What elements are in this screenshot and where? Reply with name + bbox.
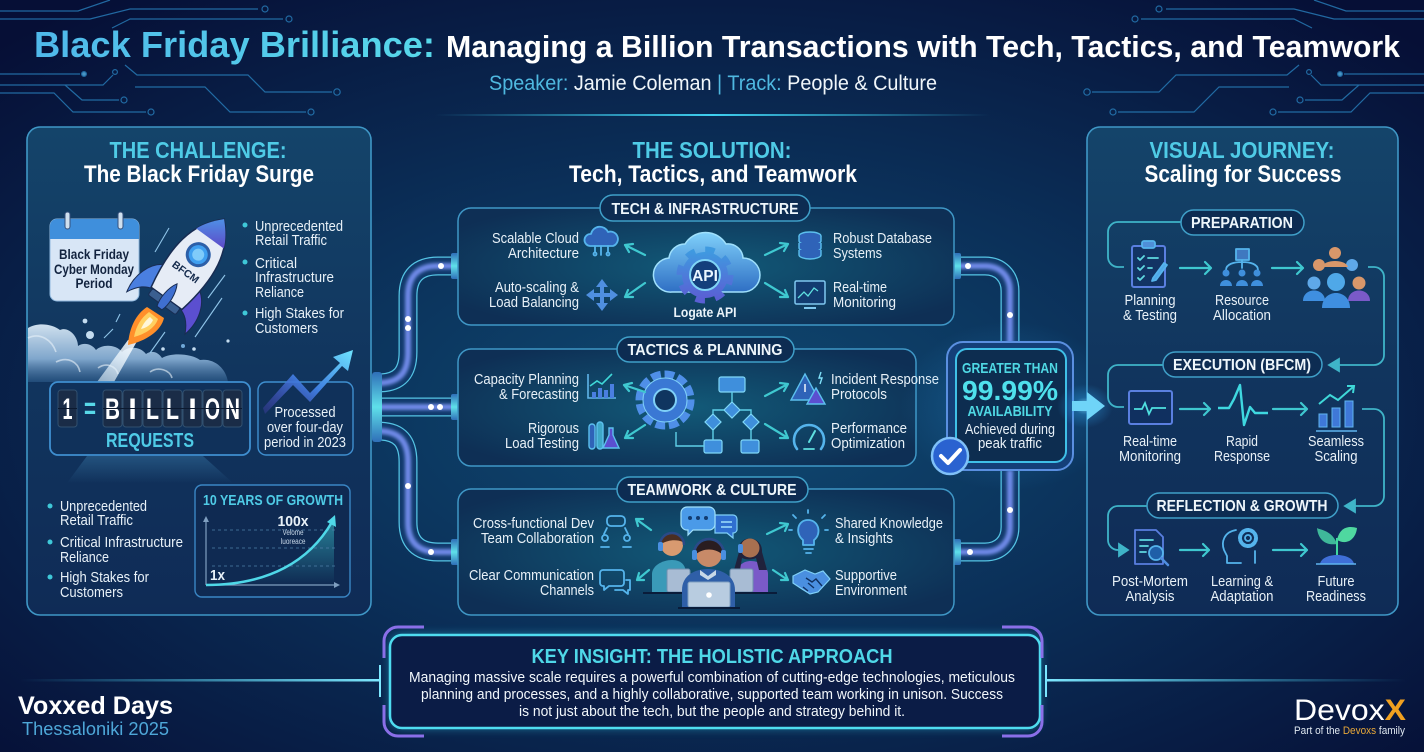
- labels: preparation: Resource: [1215, 292, 1269, 309]
- challenge heading: [84, 137, 314, 188]
- brand: voxxed days: [18, 692, 173, 739]
- icon: monitor pulse: [1129, 391, 1172, 424]
- bullets: upper list: [242, 218, 344, 337]
- labels: execution: Monitoring: [1119, 448, 1181, 465]
- icon: monitor: [795, 281, 825, 308]
- text: auto scaling: Auto-scaling &: [495, 279, 579, 296]
- text: scalable cloud: Scalable Cloud: [492, 230, 579, 247]
- title: Black Friday Brilliance:: [34, 24, 435, 65]
- pill: tactics heading: [617, 337, 794, 362]
- labels: preparation: & Testing: [1123, 307, 1177, 324]
- journey heading: VISUAL JOURNEY:: [1150, 137, 1334, 163]
- text: real-time monitoring: Monitoring: [833, 294, 896, 311]
- labels: reflection: Post-Mortem: [1112, 573, 1188, 590]
- pipes: left connectors: [372, 253, 459, 565]
- bullets: lower list: Critical Infrastructure: [60, 534, 183, 551]
- key insight side lines: [20, 665, 1406, 697]
- arrow: response to scaling: [1273, 403, 1307, 415]
- icon: rocket: BFCM: [170, 259, 201, 286]
- callout: availability: peak traffic: [978, 435, 1042, 452]
- brand: devoxx: Part of the Devoxs family: [1294, 725, 1405, 737]
- calendar: Black Friday: [59, 247, 129, 262]
- calendar: Period: [76, 276, 112, 291]
- arrow: growth zigzag: [263, 350, 353, 414]
- text: performance optimization: Performance: [831, 420, 907, 437]
- text: capacity planning: Capacity Planning: [474, 371, 579, 388]
- callout: key insight: KEY INSIGHT: THE HOLISTIC APPROACH: [532, 646, 892, 668]
- labels: reflection: Future: [1318, 573, 1354, 590]
- bullets: upper list: Reliance: [255, 284, 304, 301]
- arrow: monitoring to response: [1180, 403, 1210, 415]
- text: cross functional: [473, 515, 594, 547]
- challenge heading: The Black Friday Surge: [84, 161, 314, 188]
- pill: tech heading: [600, 195, 810, 221]
- solution heading: [569, 137, 858, 188]
- stat: one billion requests: =: [84, 392, 96, 425]
- icon: forecast chart: [588, 374, 616, 398]
- icon: handshake: [793, 570, 830, 594]
- bullets: upper list: Infrastructure: [255, 269, 334, 286]
- text: auto scaling: [489, 279, 579, 311]
- chart: 10 years of growth: Iuoreace: [280, 537, 306, 546]
- text: clear communication: [469, 567, 594, 599]
- arrows: team: [636, 519, 788, 580]
- pill: tech heading: TECH & INFRASTRUCTURE: [612, 201, 799, 218]
- callout: availability: 99.99%: [962, 375, 1058, 406]
- icon: report magnifier: [1135, 530, 1168, 565]
- icon: clipboard: [1132, 241, 1167, 287]
- labels: reflection: Analysis: [1126, 588, 1174, 605]
- labels: execution: [1119, 433, 1364, 465]
- bullets: lower list: Retail Traffic: [60, 512, 133, 529]
- arrow: learning to readiness: [1273, 544, 1307, 556]
- pipes: right connectors: [953, 253, 1013, 565]
- text: robust database: Systems: [833, 245, 882, 262]
- text: scalable cloud: Architecture: [508, 245, 579, 262]
- text: incident response: [831, 371, 939, 403]
- text: incident response: Protocols: [831, 386, 887, 403]
- text: incident response: Incident Response: [831, 371, 939, 388]
- journey heading: Scaling for Success: [1144, 161, 1342, 188]
- panel: tech and infrastructure: [458, 195, 954, 325]
- text: robust database: [833, 230, 932, 262]
- text: auto scaling: Load Balancing: [489, 294, 579, 311]
- title: Managing a Billion Transactions with Tech, Tactics, and Teamwork: [446, 29, 1401, 64]
- labels: execution: Real-time: [1123, 433, 1177, 450]
- icon: speech bubbles: [681, 507, 737, 538]
- pill: reflection: REFLECTION & GROWTH: [1156, 498, 1328, 515]
- callout: availability: Achieved during: [965, 421, 1055, 438]
- stat: one billion requests: [50, 382, 250, 455]
- brand: devoxx: DevoxX: [1294, 694, 1406, 727]
- text: scalable cloud: [492, 230, 579, 262]
- stat: one billion requests: REQUESTS: [106, 430, 194, 452]
- bullets: lower list: Unprecedented: [60, 498, 147, 515]
- glow: availability flare: [900, 321, 1120, 491]
- callout: availability: AVAILABILITY: [968, 403, 1052, 420]
- labels: execution: Seamless: [1308, 433, 1364, 450]
- callout: key insight: [384, 627, 1042, 736]
- text: real-time monitoring: [833, 279, 896, 311]
- chart: 10 years of growth: 1x: [210, 567, 226, 584]
- pill: preparation: PREPARATION: [1191, 215, 1293, 232]
- icon: support team: [643, 533, 777, 608]
- bullets: lower list: High Stakes for: [60, 569, 149, 586]
- title: [34, 24, 1401, 65]
- bullets: lower list: Reliance: [60, 549, 109, 566]
- bullets: lower list: [48, 498, 183, 601]
- text: shared knowledge: Shared Knowledge: [835, 515, 943, 532]
- labels: reflection: Readiness: [1306, 588, 1366, 605]
- text: shared knowledge: [835, 515, 943, 547]
- icon: API cloud gear: API: [692, 268, 718, 285]
- text: robust database: Robust Database: [833, 230, 932, 247]
- pill: preparation: [1181, 210, 1304, 235]
- text: capacity planning: [474, 371, 579, 403]
- icon: rocket: [126, 197, 254, 335]
- stat: processed period: Processed: [274, 404, 336, 421]
- pill: execution: [1163, 352, 1322, 377]
- sparks and particles: [83, 228, 230, 353]
- circuit decoration: top left: [0, 0, 340, 115]
- connectors: journey flow: [1108, 222, 1384, 556]
- text: rigorous load testing: Load Testing: [505, 435, 579, 452]
- stat: processed period: over four-day: [267, 419, 343, 436]
- labels: reflection: [1112, 573, 1366, 605]
- text: supportive environment: Supportive: [835, 567, 897, 584]
- circuit decoration: top right: [1084, 0, 1424, 115]
- chart: 10 years of growth: [195, 485, 350, 597]
- icon: database: [799, 232, 821, 259]
- icon: head and gear: [1223, 530, 1256, 563]
- icon: light bulb: [789, 510, 828, 553]
- labels: preparation: Planning: [1124, 292, 1176, 309]
- text: performance optimization: Optimization: [831, 435, 905, 452]
- callout: key insight: Managing massive scale requires a powerful combination of cutting-edge technologies, meticulous: [409, 669, 1015, 686]
- chart: 10 years of growth: 10 YEARS OF GROWTH: [203, 492, 343, 509]
- stat: processed period: period in 2023: [264, 434, 346, 451]
- stat: one billion requests: 1: [62, 393, 72, 426]
- icon: gear and flowchart: [641, 376, 759, 453]
- text: supportive environment: Environment: [835, 582, 908, 599]
- rocket flame: [128, 307, 164, 345]
- pill: reflection: [1147, 493, 1338, 518]
- labels: reflection: Adaptation: [1210, 588, 1274, 605]
- callout: key insight: planning and processes, and a highly collaborative, supported team working in unison. Success: [421, 686, 1003, 703]
- icon: pulse: [1218, 385, 1268, 425]
- labels: execution: Response: [1214, 448, 1270, 465]
- labels: preparation: [1123, 292, 1271, 324]
- solution heading: THE SOLUTION:: [632, 137, 792, 163]
- pill: tactics heading: TACTICS & PLANNING: [628, 342, 782, 359]
- stat: one billion requests: O: [205, 393, 220, 426]
- panel: teamwork and culture: [458, 477, 954, 615]
- chart: 10 years of growth: 100x: [278, 514, 308, 530]
- icon: chat: [600, 570, 630, 594]
- arrows: tactics: [624, 383, 788, 438]
- icon: scale arrows: [586, 279, 618, 311]
- subtitle: Speaker: Jamie Coleman | Track: People & Culture: [489, 71, 937, 95]
- light beam below stat: [67, 456, 233, 483]
- text: cross functional: Team Collaboration: [481, 530, 594, 547]
- pill: execution: EXECUTION (BFCM): [1173, 357, 1311, 374]
- panel: visual journey: [1087, 127, 1398, 615]
- stat: one billion requests: I: [188, 393, 197, 426]
- icon: test tubes: [589, 422, 619, 449]
- solution heading: Tech, Tactics, and Teamwork: [569, 161, 858, 188]
- icon: API cloud gear: [653, 232, 760, 299]
- callout: availability: GREATER THAN: [962, 360, 1058, 377]
- panel: the challenge: [27, 127, 371, 615]
- bullets: lower list: Customers: [60, 584, 123, 601]
- text: clear communication: Clear Communication: [469, 567, 594, 584]
- stat: one billion requests: I: [128, 393, 137, 426]
- challenge heading: THE CHALLENGE:: [110, 137, 286, 163]
- arrow: resource to team: [1272, 262, 1303, 274]
- pill: teamwork heading: TEAMWORK & CULTURE: [628, 482, 797, 499]
- bullets: upper list: Retail Traffic: [255, 232, 327, 249]
- text: capacity planning: & Forecasting: [499, 386, 579, 403]
- text: cross functional: Cross-functional Dev: [473, 515, 594, 532]
- icon: team circle: [1303, 247, 1370, 308]
- text: real-time monitoring: Real-time: [833, 279, 887, 296]
- bullets: upper list: Unprecedented: [255, 218, 343, 235]
- text: rigorous load testing: [505, 420, 579, 452]
- arrow: analysis to learning: [1180, 544, 1209, 556]
- arrows: api: [625, 243, 788, 297]
- text: performance optimization: [831, 420, 907, 452]
- brand: voxxed days: Thessaloniki 2025: [22, 719, 169, 739]
- labels: execution: Scaling: [1314, 448, 1358, 465]
- text: clear communication: Channels: [540, 582, 594, 599]
- labels: execution: Rapid: [1226, 433, 1258, 450]
- icon: sprout: [1316, 527, 1357, 564]
- icon: check badge: [932, 438, 968, 474]
- calendar: [50, 212, 139, 301]
- bullets: upper list: Critical: [255, 255, 297, 272]
- panel: tactics and planning: [458, 337, 939, 466]
- stat: processed period: [258, 382, 353, 455]
- icon: cloud nodes: [584, 227, 618, 256]
- callout: key insight: is not just about the tech, but the people and strategy behind it.: [519, 703, 905, 720]
- labels: preparation: Allocation: [1213, 307, 1271, 324]
- stat: one billion requests: L: [146, 393, 159, 426]
- brand: voxxed days: Voxxed Days: [18, 692, 173, 720]
- arrow: planning to resource: [1180, 262, 1211, 274]
- icon: org chart: [1220, 249, 1263, 286]
- bullets: upper list: High Stakes for: [255, 305, 344, 322]
- stat: one billion requests: N: [225, 393, 240, 426]
- rocket trail: [97, 336, 140, 382]
- icon: scaling chart: [1316, 386, 1357, 431]
- calendar: Cyber Monday: [54, 262, 134, 277]
- text: shared knowledge: & Insights: [835, 530, 893, 547]
- bullets: upper list: Customers: [255, 320, 318, 337]
- icon: collaboration: [601, 516, 631, 547]
- chart: 10 years of growth: Velome: [282, 528, 304, 537]
- stat: one billion requests: L: [166, 393, 179, 426]
- header divider glow: [435, 114, 990, 116]
- text: supportive environment: [835, 567, 908, 599]
- journey heading: [1144, 137, 1342, 188]
- stat: one billion requests: B: [105, 393, 120, 426]
- cloud puffs: [28, 336, 172, 378]
- callout: availability: [947, 342, 1073, 470]
- icon: warning triangles: [791, 372, 825, 404]
- icon: gauge: [794, 425, 824, 449]
- labels: reflection: Learning &: [1211, 573, 1273, 590]
- clouds: [28, 324, 228, 382]
- text: rigorous load testing: Rigorous: [528, 420, 579, 437]
- arrow: to visual journey: [1057, 384, 1113, 428]
- pill: teamwork heading: [617, 477, 808, 502]
- text: api label: Logate API: [674, 305, 736, 320]
